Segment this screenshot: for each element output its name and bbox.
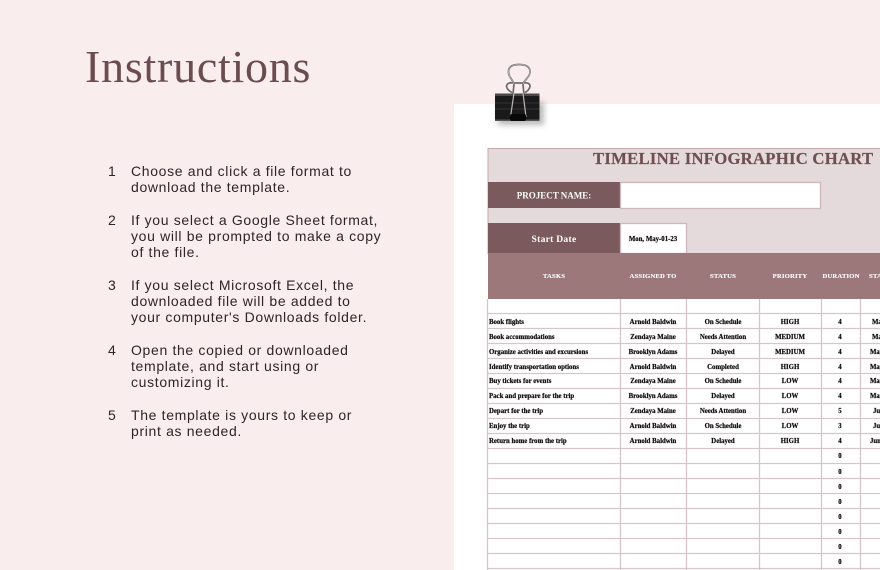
step 2: of the file. <box>131 244 200 260</box>
step 1: download the template. <box>131 179 290 195</box>
row 4: 4 <box>838 364 842 371</box>
table header: PRIORITY <box>773 273 807 280</box>
start date label: Start Date <box>532 235 576 245</box>
empty rows with zero durations: 0 <box>838 499 842 506</box>
spreadsheet top band <box>488 148 880 254</box>
row 6: Brooklyn Adams <box>629 393 678 400</box>
step 5 <box>108 407 352 439</box>
row 7: Zendaya Maine <box>630 408 676 415</box>
row 1: 4 <box>838 319 842 326</box>
row 1: Arnold Baldwin <box>630 319 677 326</box>
row 3: 4 <box>838 349 842 356</box>
empty rows with zero durations: 0 <box>838 514 842 521</box>
row 9 <box>489 438 880 445</box>
spreadsheet <box>488 148 880 570</box>
step 2 <box>108 212 381 260</box>
row 9: 4 <box>838 438 842 445</box>
row 7: Depart for the trip <box>489 408 543 415</box>
step 2: you will be prompted to make a copy <box>131 228 381 244</box>
step 4: template, and start using or <box>131 358 319 374</box>
row 7 <box>489 408 880 415</box>
empty rows with zero durations: 0 <box>838 529 842 536</box>
row 7: LOW <box>782 408 799 415</box>
row 3: Brooklyn Adams <box>629 349 678 356</box>
row 4: HIGH <box>781 364 800 371</box>
white paper sheet <box>454 104 880 570</box>
row 1: Book flights <box>489 319 524 326</box>
row 9: Arnold Baldwin <box>630 438 677 445</box>
row 4: Completed <box>707 364 739 371</box>
step 3: If you select Microsoft Excel, the <box>131 277 354 293</box>
row 5: Zendaya Maine <box>630 378 676 385</box>
row 8: On Schedule <box>705 423 741 430</box>
row 6: Delayed <box>711 393 735 400</box>
row 2: Zendaya Maine <box>630 334 676 341</box>
table grid <box>488 299 880 570</box>
step 4: Open the copied or downloaded <box>131 342 349 358</box>
row 9: Return home from the trip <box>489 438 567 445</box>
row 1: HIGH <box>781 319 800 326</box>
step 4: 4 <box>108 342 116 358</box>
step 2: If you select a Google Sheet format, <box>131 212 378 228</box>
row 2: 4 <box>838 334 842 341</box>
row 2: Book accommodations <box>489 334 555 341</box>
row 5: LOW <box>782 378 799 385</box>
start date label <box>488 223 620 253</box>
row 8 <box>489 423 880 430</box>
table rows <box>489 319 880 566</box>
empty rows with zero durations: 0 <box>838 544 842 551</box>
row 1: On Schedule <box>705 319 741 326</box>
start date value: Mon, May-01-23 <box>629 236 678 243</box>
row 5: Buy tickets for events <box>489 378 552 385</box>
step 4: customizing it. <box>131 374 230 390</box>
empty rows with zero durations: 0 <box>838 559 842 566</box>
row 4: Arnold Baldwin <box>630 364 677 371</box>
row 8: 3 <box>838 423 842 430</box>
row 6: Pack and prepare for the trip <box>489 393 574 400</box>
start date value <box>620 224 686 254</box>
project name input <box>620 182 820 208</box>
row 8: LOW <box>782 423 799 430</box>
row 3 <box>489 349 880 356</box>
row 6: 4 <box>838 393 842 400</box>
empty rows with zero durations: 0 <box>838 484 842 491</box>
step 3: 3 <box>108 277 116 293</box>
project name label <box>488 182 620 208</box>
row 9: Delayed <box>711 438 735 445</box>
row 5: 4 <box>838 378 842 385</box>
table header: DURATION <box>822 273 860 280</box>
row 7: Needs Attention <box>700 408 746 415</box>
row 6 <box>489 393 880 400</box>
icon: binder clip <box>495 64 544 125</box>
row 6: LOW <box>782 393 799 400</box>
step 5: The template is yours to keep or <box>131 407 352 423</box>
step 3: downloaded file will be added to <box>131 293 351 309</box>
step 5: print as needed. <box>131 423 242 439</box>
step 3: your computer's Downloads folder. <box>131 309 367 325</box>
row 5 <box>489 378 880 385</box>
row 5: On Schedule <box>705 378 741 385</box>
row 2: MEDIUM <box>775 334 805 341</box>
row 7: 5 <box>838 408 842 415</box>
row 9: HIGH <box>781 438 800 445</box>
project name label: PROJECT NAME: <box>517 190 591 200</box>
table header <box>488 253 880 299</box>
step 1: 1 <box>108 163 116 179</box>
table header: STATUS <box>710 273 736 280</box>
step 5: 5 <box>108 407 116 423</box>
row 3: Organize activities and excursions <box>489 349 588 356</box>
row 2: Needs Attention <box>700 334 746 341</box>
table header: ASSIGNED TO <box>630 273 676 280</box>
step 1: Choose and click a file format to <box>131 163 352 179</box>
row 2 <box>489 334 880 341</box>
row 4 <box>489 364 880 371</box>
step 3 <box>108 277 367 325</box>
title: Instructions <box>85 41 311 92</box>
empty rows with zero durations <box>838 453 842 566</box>
spreadsheet title: TIMELINE INFOGRAPHIC CHART <box>593 149 873 168</box>
row 4: Identify transportation options <box>489 364 579 371</box>
row 3: MEDIUM <box>775 349 805 356</box>
row 8: Enjoy the trip <box>489 423 530 430</box>
table header: TASKS <box>543 273 565 280</box>
step 4 <box>108 342 349 390</box>
row 1 <box>489 319 880 326</box>
empty rows with zero durations: 0 <box>838 469 842 476</box>
step 2: 2 <box>108 212 116 228</box>
empty rows with zero durations: 0 <box>838 453 842 460</box>
row 8: Arnold Baldwin <box>630 423 677 430</box>
step 1 <box>108 163 352 195</box>
row 3: Delayed <box>711 349 735 356</box>
